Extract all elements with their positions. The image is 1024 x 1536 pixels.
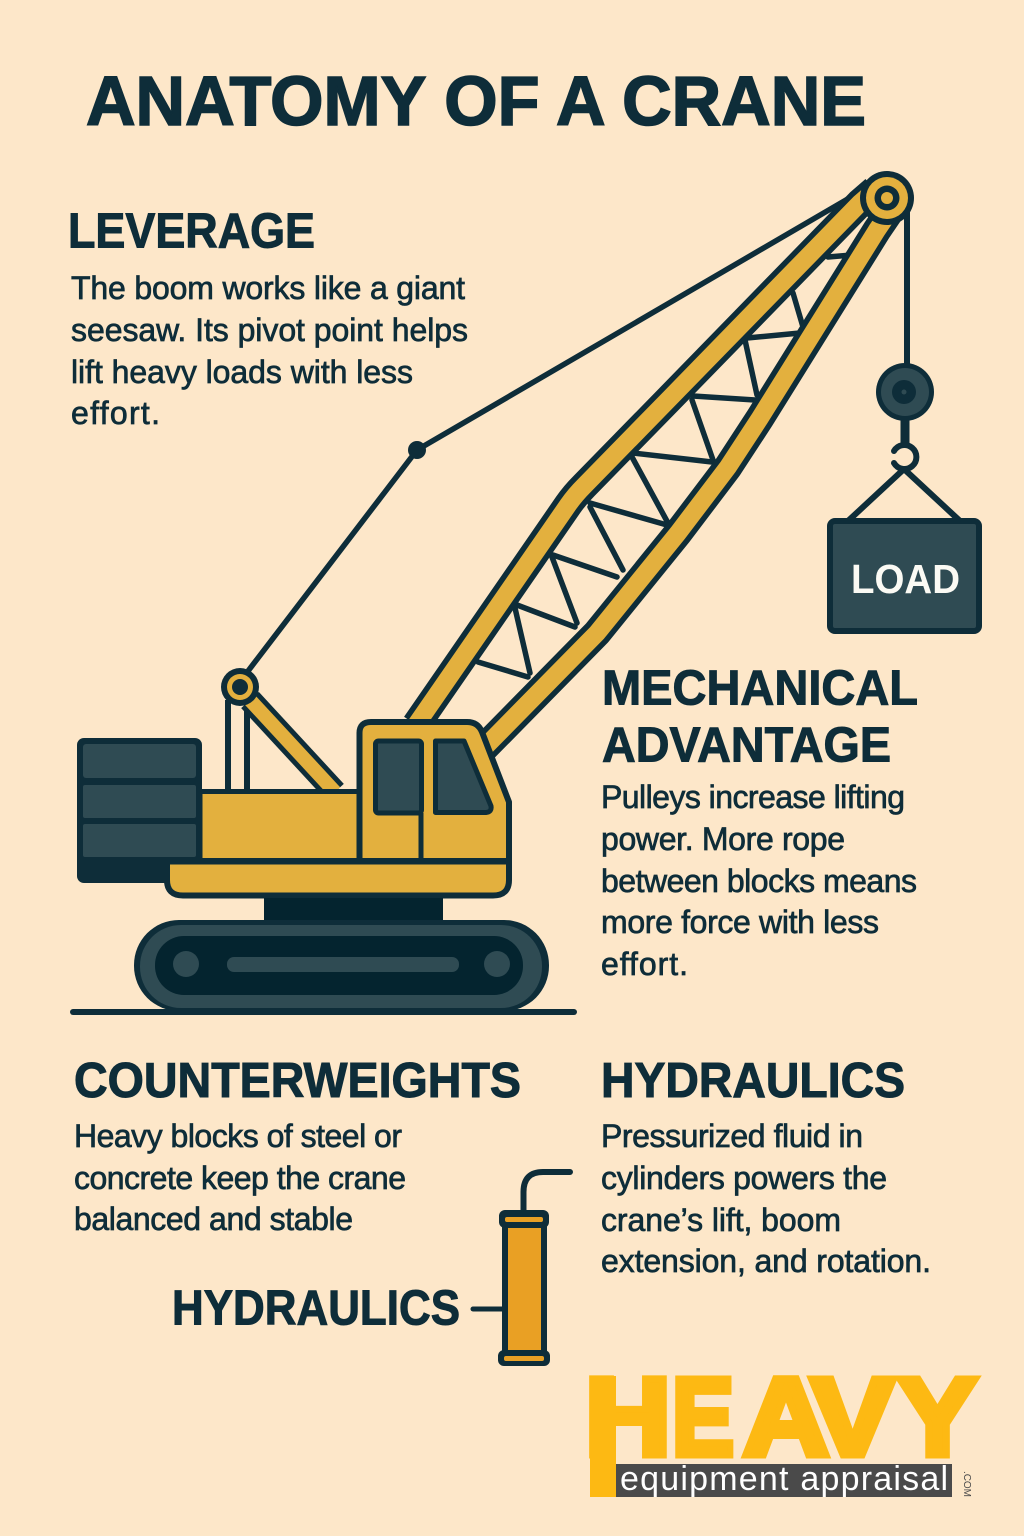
heading: hydraulics: HYDRAULICS (601, 1054, 905, 1108)
text block: hydraulics description: extension, and rotation. (601, 1243, 931, 1279)
panel: hydraulics (601, 1054, 931, 1279)
load block (830, 521, 979, 631)
logo: heavy equipment appraisal (585, 1356, 977, 1498)
panel: counterweights (74, 1054, 521, 1237)
title: ANATOMY OF A CRANE (86, 62, 866, 140)
logo h stem (590, 1376, 616, 1497)
slewing pedestal (264, 898, 443, 926)
hydraulic cylinder diagram (172, 1172, 570, 1366)
hose (524, 1172, 570, 1212)
text block: counterweights description (74, 1118, 406, 1237)
panel: mechanical advantage (601, 662, 918, 982)
cab window right (436, 741, 491, 812)
text block: hydraulics description: Pressurized fluid in (601, 1118, 863, 1154)
text block: mechanical advantage description: effort. (601, 946, 688, 982)
a-frame struts (228, 700, 335, 792)
panel: leverage (68, 204, 468, 431)
logo wordmark: A (743, 1356, 829, 1479)
label: hydraulics: HYDRAULICS (172, 1282, 460, 1336)
text block: counterweights description: concrete keep the crane (74, 1160, 406, 1196)
text block: leverage description: The boom works like a giant (71, 270, 465, 306)
load block: LOAD (851, 556, 960, 602)
heading: mechanical advantage (602, 662, 918, 772)
text block: hydraulics description (601, 1118, 931, 1279)
boom chords (416, 190, 892, 752)
heading: leverage: LEVERAGE (68, 204, 315, 258)
sling (848, 469, 960, 521)
text block: mechanical advantage description: power. More rope (601, 821, 845, 857)
logo wordmark: Y (898, 1356, 977, 1479)
text block: leverage description: effort. (71, 395, 160, 431)
text block: mechanical advantage description (601, 779, 917, 982)
boom lattice (478, 255, 852, 677)
text block: leverage description (71, 270, 468, 431)
logo bar (616, 1464, 952, 1497)
heading: counterweights: COUNTERWEIGHTS (74, 1054, 521, 1108)
text block: mechanical advantage description: more force with less (601, 904, 879, 940)
text block: hydraulics description: cylinders powers the (601, 1160, 887, 1196)
a-frame pulley (221, 668, 259, 706)
cylinder bottom cap (498, 1350, 550, 1366)
deck (167, 862, 509, 896)
crane illustration (70, 171, 979, 1015)
machine house (200, 792, 360, 860)
cylinder body (505, 1222, 544, 1356)
text block: counterweights description: Heavy blocks of steel or (74, 1118, 402, 1154)
logo domain: .COM (961, 1471, 972, 1497)
hoist rope (904, 210, 910, 370)
heading: mechanical advantage: MECHANICAL (602, 662, 918, 716)
text block: mechanical advantage description: between blocks means (601, 863, 917, 899)
text block: leverage description: seesaw. Its pivot point helps (71, 312, 468, 348)
ground line (70, 1009, 577, 1015)
logo wordmark: E (672, 1356, 734, 1479)
logo subtitle: equipment appraisal (620, 1460, 948, 1498)
text block: hydraulics description: crane’s lift, boom (601, 1202, 841, 1238)
logo wordmark: V (811, 1356, 894, 1479)
text block: leverage description: lift heavy loads with less (71, 354, 413, 390)
hook block (876, 363, 934, 469)
cab (360, 722, 509, 861)
pendant rope (245, 186, 870, 675)
logo wordmark: H (585, 1356, 671, 1479)
cab window left (376, 741, 422, 813)
counterweights (77, 738, 202, 883)
boom tip sheave (860, 171, 914, 225)
leader line (473, 1306, 504, 1312)
crawler track (134, 920, 549, 1011)
text block: mechanical advantage description: Pulleys increase lifting (601, 779, 905, 815)
text block: counterweights description: balanced and stable (74, 1201, 353, 1237)
cylinder top cap (499, 1210, 549, 1228)
logo wordmark (585, 1356, 977, 1479)
heading: mechanical advantage: ADVANTAGE (602, 718, 891, 772)
